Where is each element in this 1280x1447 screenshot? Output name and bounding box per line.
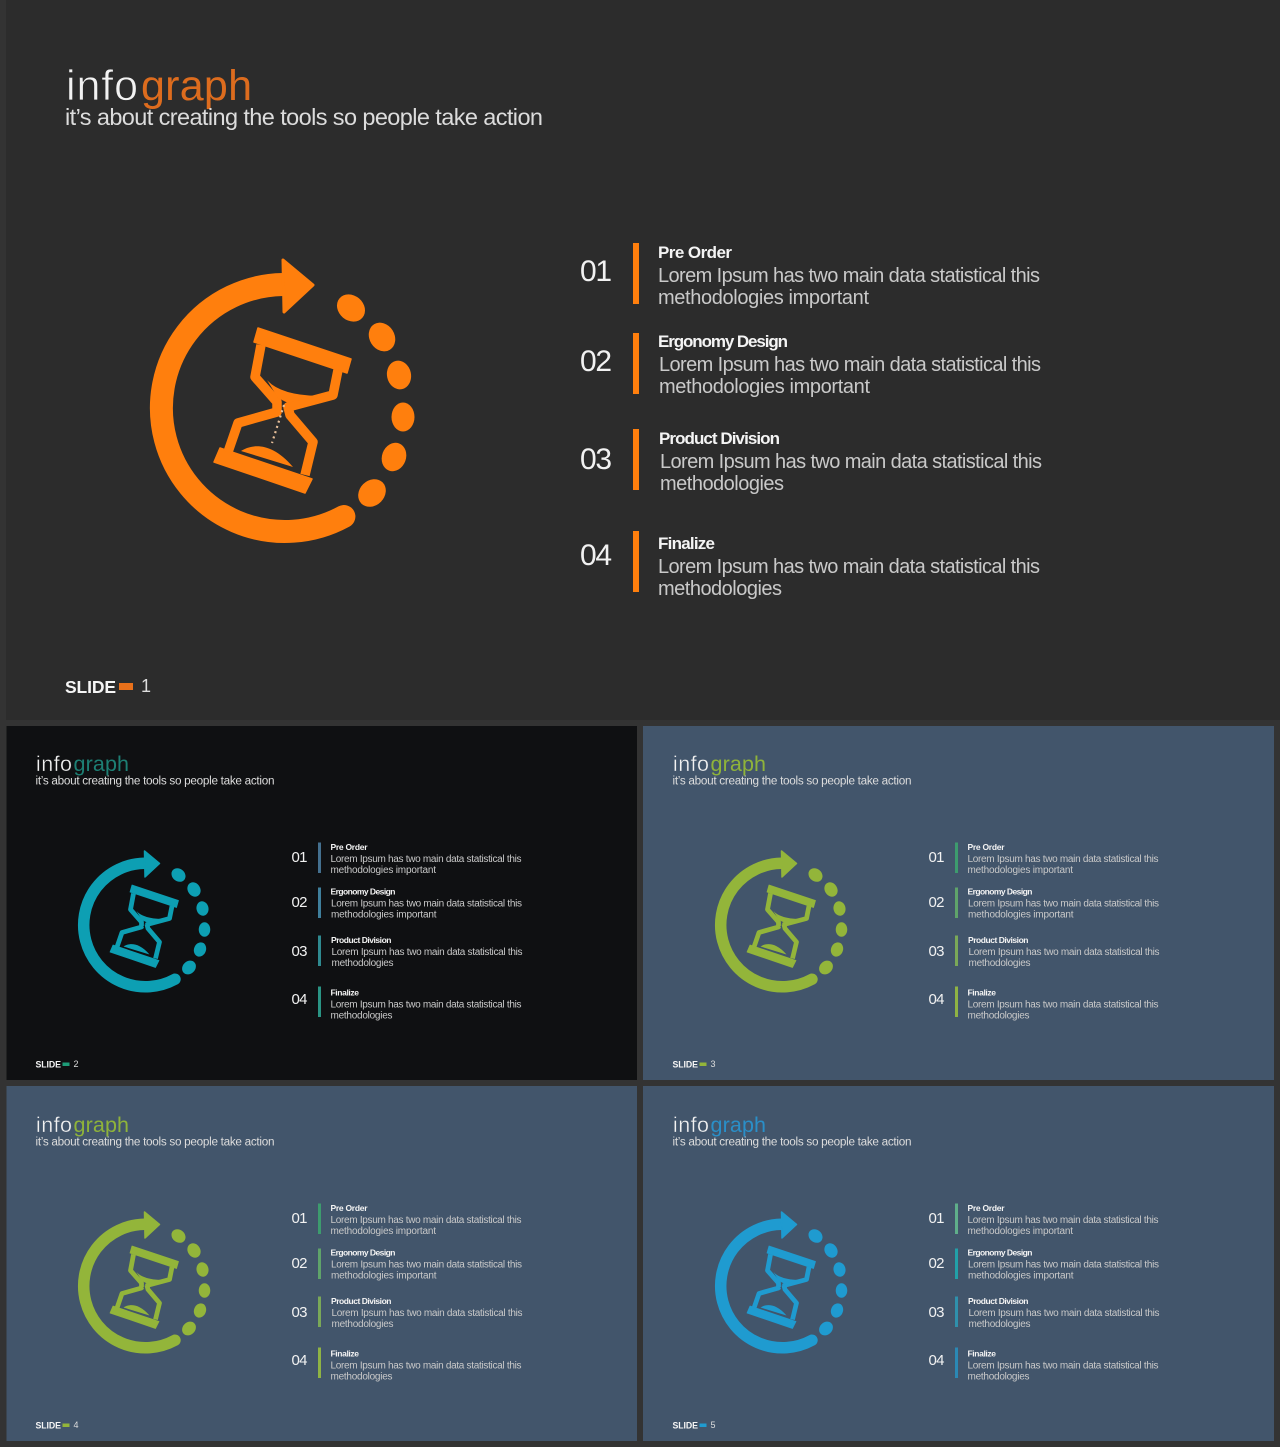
slide 5 content (672, 1113, 1160, 1430)
list item 01: Lorem Ipsum has two main data statistical this (968, 854, 1158, 865)
title: graph (74, 752, 129, 776)
title: graph (710, 1113, 766, 1137)
subtitle: it’s about creating the tools so people take action (672, 774, 912, 788)
list item 04: Lorem Ipsum has two main data statistical this (330, 1000, 522, 1010)
title: info (36, 1113, 72, 1137)
list item 04: methodologies (968, 1010, 1030, 1022)
list item 03: 03 (292, 1304, 308, 1321)
list item 02: methodologies important (331, 910, 437, 920)
list item 04 (580, 531, 1040, 600)
panel: slide 5 blue on slate (643, 1086, 1274, 1441)
list item 03 (580, 429, 1042, 495)
list item 01: 01 (292, 1210, 308, 1227)
panel: slide 2 teal on black (6, 726, 637, 1080)
panel: slide 3 lime on slate (643, 726, 1274, 1080)
list item 03: methodologies (968, 958, 1030, 969)
list item 01: 01 (928, 849, 944, 866)
list item 01 (928, 1203, 1158, 1237)
icon: hourglass with circular arrow (161, 260, 414, 532)
list item 01: Lorem Ipsum has two main data statistical this (330, 1215, 522, 1226)
slide label: 1 (141, 676, 151, 696)
list item 04: Finalize (968, 988, 996, 998)
slide label (65, 676, 151, 697)
slide label: 3 (710, 1059, 716, 1069)
slide label: SLIDE (672, 1060, 698, 1070)
slide label: SLIDE (672, 1420, 698, 1430)
list item 04 (292, 1348, 522, 1382)
list item 04: methodologies (330, 1010, 392, 1022)
title: info (36, 752, 72, 776)
list item 02: Ergonomy Design (968, 886, 1032, 896)
list item 01: Pre Order (968, 1203, 1005, 1213)
slide label (672, 1420, 716, 1430)
list item 03: Product Division (968, 1296, 1028, 1306)
slide label (672, 1059, 716, 1070)
list item 02 (928, 1248, 1159, 1282)
list item 02: methodologies important (659, 376, 870, 398)
list item 04 (928, 1348, 1158, 1382)
list item 03: methodologies (660, 473, 784, 495)
list item 02: 02 (580, 345, 612, 378)
subtitle: it’s about creating the tools so people take action (65, 104, 543, 130)
list item 03: 03 (292, 943, 308, 960)
slide label: SLIDE (36, 1060, 61, 1070)
list item 01: methodologies important (658, 287, 869, 309)
slide label (36, 1420, 79, 1430)
list item 03: methodologies (332, 1319, 394, 1330)
list item 03: Lorem Ipsum has two main data statistical this (660, 451, 1042, 473)
list item 02 (292, 1248, 522, 1282)
title (673, 1113, 766, 1137)
list item 02: Ergonomy Design (330, 886, 396, 896)
list item 04: methodologies (658, 578, 782, 600)
list item 02: 02 (928, 894, 944, 911)
list item 01: methodologies important (968, 1226, 1073, 1237)
list item 03: methodologies (968, 1319, 1030, 1330)
list item 04: methodologies (330, 1372, 392, 1382)
list item 04: 04 (928, 1352, 944, 1369)
title (66, 62, 252, 110)
list item 01 (292, 842, 522, 876)
icon: hourglass with circular arrow (721, 851, 847, 987)
title: info (673, 752, 709, 776)
slide label: SLIDE (36, 1420, 61, 1430)
list item 02: 02 (292, 894, 308, 911)
list item 03 (928, 935, 1160, 969)
list item 04: 04 (580, 539, 612, 572)
list item 01: methodologies important (968, 865, 1073, 876)
title: graph (74, 1113, 129, 1137)
list item 04: Finalize (330, 988, 359, 998)
list item 01 (292, 1203, 522, 1237)
title (36, 752, 129, 776)
list item 01: 01 (928, 1210, 944, 1227)
slide label: SLIDE (65, 677, 116, 697)
slide label: 5 (710, 1420, 716, 1430)
list item 02 (580, 332, 1041, 398)
list item 03: Product Division (331, 935, 392, 945)
list item 04 (928, 986, 1158, 1022)
title: info (673, 1113, 709, 1137)
subtitle: it’s about creating the tools so people take action (36, 774, 274, 788)
list item 01: Lorem Ipsum has two main data statistical this (330, 854, 522, 865)
subtitle: it’s about creating the tools so people take action (672, 1136, 912, 1148)
list item 04: Lorem Ipsum has two main data statistical this (968, 1360, 1158, 1372)
list item 02: Lorem Ipsum has two main data statistical this (331, 1260, 522, 1270)
list item 01: 01 (292, 849, 308, 866)
slide 2 content (36, 752, 522, 1070)
list item 02: Lorem Ipsum has two main data statistical this (659, 354, 1041, 376)
list item 02: Ergonomy Design (658, 332, 788, 351)
list item 02: Lorem Ipsum has two main data statistical this (968, 1260, 1159, 1270)
list item 02: 02 (928, 1255, 944, 1272)
icon: hourglass with circular arrow (84, 851, 210, 987)
list item 01 (928, 842, 1158, 876)
list item 04: Lorem Ipsum has two main data statistical this (658, 556, 1040, 578)
list item 04: Finalize (658, 534, 715, 553)
list item 02: Ergonomy Design (330, 1248, 396, 1258)
list item 01: methodologies important (330, 1226, 436, 1237)
list item 03: Product Division (331, 1296, 392, 1306)
list item 01: Pre Order (658, 243, 732, 262)
list item 04: Lorem Ipsum has two main data statistical this (968, 1000, 1158, 1010)
title (36, 1113, 129, 1137)
title: graph (710, 752, 766, 776)
title: info (66, 62, 138, 110)
list item 01: Pre Order (968, 842, 1005, 852)
list item 01: 01 (580, 255, 612, 288)
list item 02: methodologies important (331, 1270, 437, 1282)
list item 04: Lorem Ipsum has two main data statistical this (330, 1360, 522, 1372)
list item 03: 03 (928, 1304, 944, 1321)
list item 04: 04 (292, 991, 308, 1008)
list item 03: Lorem Ipsum has two main data statistical this (332, 947, 522, 958)
icon: hourglass with circular arrow (721, 1212, 847, 1348)
list item 03 (292, 1296, 522, 1330)
slide label: 4 (74, 1420, 79, 1430)
list item 03: Product Division (659, 429, 780, 448)
list item 03: Lorem Ipsum has two main data statistical this (968, 947, 1160, 958)
slide 3 content (672, 752, 1160, 1070)
list item 04 (292, 986, 522, 1022)
list item 04: Finalize (330, 1348, 359, 1358)
list item 02: Ergonomy Design (968, 1248, 1032, 1258)
list item 02: 02 (292, 1255, 308, 1272)
list item 03 (928, 1296, 1160, 1330)
list item 04: 04 (928, 991, 944, 1008)
list item 03 (292, 935, 522, 969)
list item 02: Lorem Ipsum has two main data statistical this (968, 898, 1159, 910)
list item 03: 03 (928, 943, 944, 960)
list item 01: Lorem Ipsum has two main data statistical this (968, 1215, 1158, 1226)
slide 4 content (36, 1113, 522, 1430)
panel: slide 1 orange on charcoal (6, 0, 1280, 720)
title (673, 752, 766, 776)
list item 02: methodologies important (968, 1270, 1074, 1282)
slide label (36, 1059, 79, 1070)
list item 01: Pre Order (330, 842, 368, 852)
list item 03: methodologies (332, 958, 394, 969)
list item 03: Lorem Ipsum has two main data statistical this (332, 1308, 522, 1319)
list item 03: Product Division (968, 935, 1028, 945)
list item 01: Lorem Ipsum has two main data statistical this (658, 265, 1040, 287)
list item 01: Pre Order (330, 1203, 368, 1213)
list item 04: 04 (292, 1352, 308, 1369)
icon: hourglass with circular arrow (84, 1212, 210, 1348)
panel: slide 4 lime on slate (6, 1086, 637, 1441)
subtitle: it’s about creating the tools so people take action (36, 1136, 274, 1148)
list item 02 (928, 886, 1159, 920)
list item 04: Finalize (968, 1348, 996, 1358)
list item 03: Lorem Ipsum has two main data statistical this (968, 1308, 1160, 1319)
slide label: 2 (74, 1059, 79, 1069)
list item 02: Lorem Ipsum has two main data statistical this (331, 898, 522, 910)
list item 01 (580, 243, 1040, 309)
list item 03: 03 (580, 443, 612, 476)
list item 02: methodologies important (968, 910, 1074, 920)
list item 04: methodologies (968, 1372, 1030, 1382)
list item 01: methodologies important (330, 865, 436, 876)
title: graph (141, 62, 252, 110)
list item 02 (292, 886, 522, 920)
